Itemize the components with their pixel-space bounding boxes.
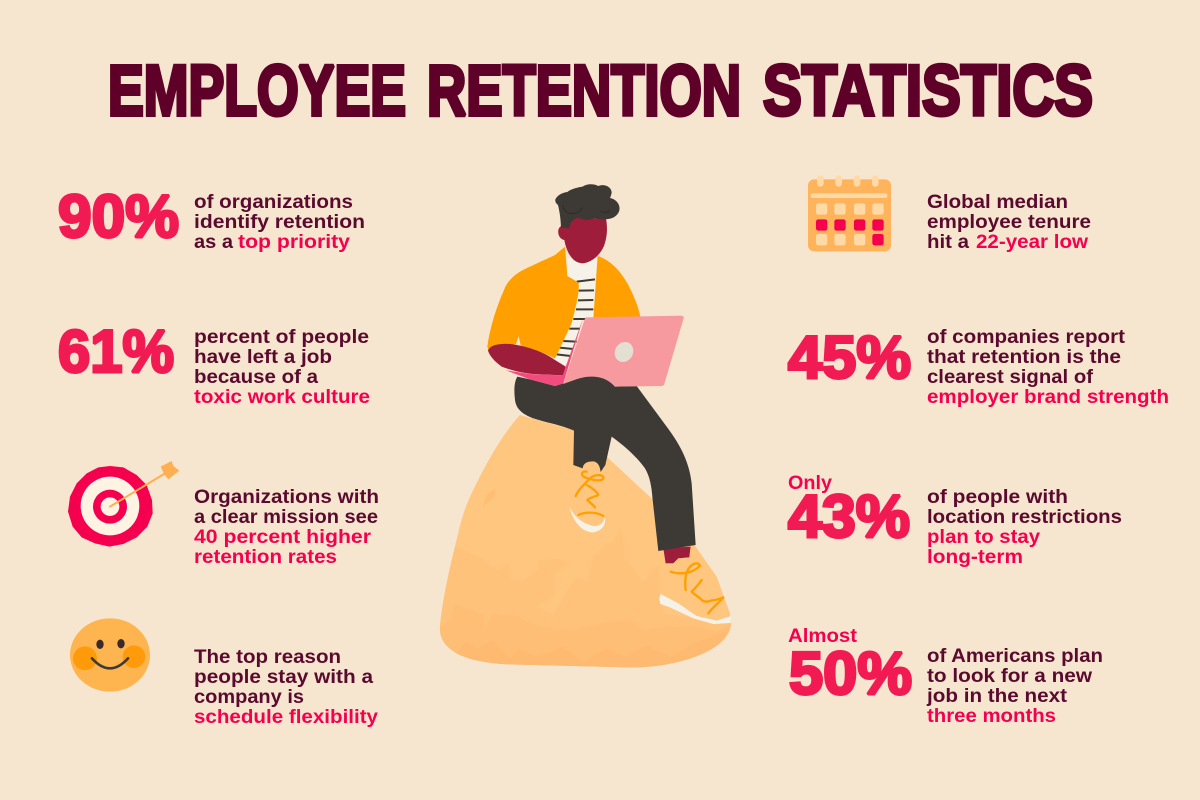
title: RETENTION [427, 52, 741, 131]
title [108, 52, 1093, 131]
stat: almost 50%: three months [927, 706, 1056, 727]
stat: mission: 40 percent higher [194, 527, 372, 548]
stat: top reason: people stay with a [194, 667, 373, 688]
laptop logo [611, 339, 637, 365]
stat: mission: retention rates [194, 547, 337, 568]
stat: only 43% [788, 473, 1122, 568]
stat: 45%: clearest signal of [927, 367, 1094, 388]
stat: 90%: of organizations [194, 192, 353, 213]
title: EMPLOYEE [108, 52, 406, 131]
stat: top reason: company is [194, 687, 304, 708]
stat: only 43%: location restrictions [927, 507, 1122, 528]
shoes [569, 472, 731, 624]
laptop screen [563, 316, 684, 387]
title: STATISTICS [763, 52, 1093, 131]
stat: almost 50%: job in the next [926, 686, 1068, 707]
icon: smiley [70, 618, 150, 692]
hair [555, 184, 620, 228]
illustration: person with laptop sitting on rock [440, 184, 731, 667]
stat: almost 50%: 50% [789, 640, 912, 707]
stat: tenure: Global median [927, 192, 1068, 213]
laptop base [506, 317, 583, 386]
sock [663, 547, 691, 563]
stat: top reason [194, 647, 378, 728]
stat: 90% [58, 183, 365, 253]
stat: 61%: because of a [194, 367, 318, 388]
stat: mission [194, 487, 379, 568]
stat: 61% [58, 318, 370, 408]
stat: almost 50%: Almost [788, 626, 858, 647]
stat: 61%: toxic work culture [194, 387, 370, 408]
stat: 61%: 61% [58, 318, 174, 385]
rock [440, 415, 731, 667]
stat: tenure [927, 192, 1091, 253]
stat: 61%: have left a job [194, 347, 332, 368]
icon: target with arrow [68, 461, 179, 547]
person [487, 184, 731, 624]
arm [488, 344, 566, 375]
shirt [487, 184, 684, 387]
stat: 45%: 45% [788, 324, 911, 391]
stat: 90%: top priority [238, 232, 350, 253]
stat: almost 50%: to look for a new [927, 666, 1092, 687]
jacket [487, 247, 579, 358]
stat: 90%: identify retention [194, 212, 365, 233]
stat: only 43%: Only [788, 473, 832, 494]
stat: top reason: schedule flexibility [194, 707, 378, 728]
trousers [514, 376, 696, 551]
stat: mission: a clear mission see [194, 507, 378, 528]
stat: almost 50%: of Americans plan [927, 646, 1103, 667]
stat: only 43%: of people with [927, 487, 1068, 508]
stat: tenure: hit a [927, 232, 969, 253]
face [558, 217, 607, 263]
stat: tenure: employee tenure [927, 212, 1091, 233]
stat: only 43%: plan to stay [927, 527, 1040, 548]
icon: calendar [808, 175, 891, 251]
stat: only 43%: long-term [927, 547, 1023, 568]
stat: only 43%: 43% [788, 483, 910, 550]
stat: 45%: that retention is the [927, 347, 1121, 368]
stat: 90%: 90% [58, 183, 179, 250]
stat: 45% [788, 324, 1169, 408]
stat: 45%: employer brand strength [927, 387, 1169, 408]
stat: top reason: The top reason [194, 647, 341, 668]
stat: tenure: 22-year low [976, 232, 1088, 253]
stat: almost 50% [788, 626, 1103, 727]
stat: 45%: of companies report [927, 327, 1126, 348]
stat: 61%: percent of people [194, 327, 369, 348]
stat: 90%: as a [194, 232, 233, 253]
stat: mission: Organizations with [194, 487, 379, 508]
